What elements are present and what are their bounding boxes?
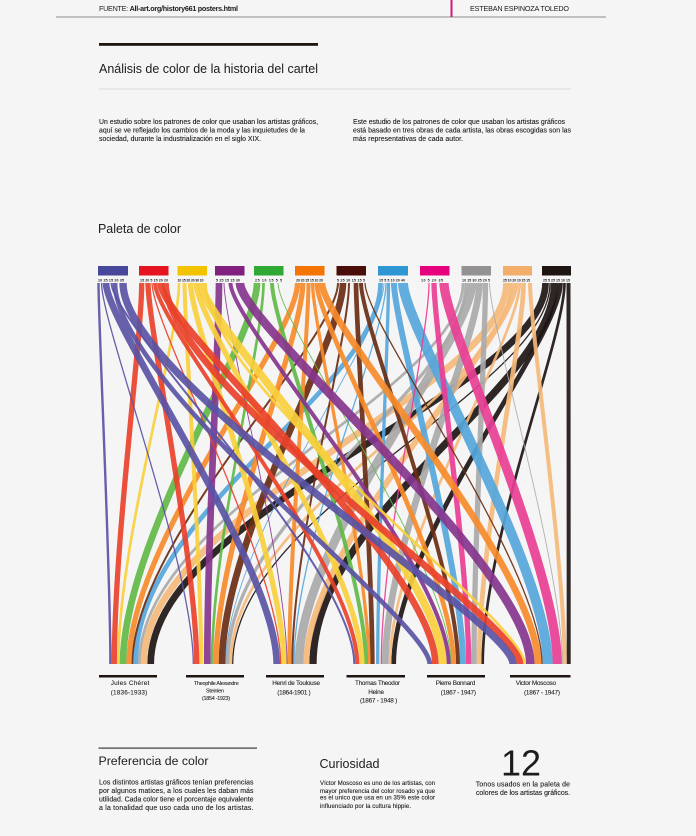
percentage labels under swatches: 10 5 20 35 [421, 278, 443, 282]
artist label: Jules Chéret [111, 680, 150, 696]
intro text right: Este estudio de los patrones de color que usaban los artistas gráficos [353, 119, 566, 126]
body text: Víctor Moscoso es uno de los artistas, con [320, 781, 435, 787]
artist label: Thomas Theodor Heine: (1867 - 1948 ) [360, 698, 397, 704]
source credit: FUENTE: All-art.org/history661 posters.html [99, 4, 238, 13]
percentage labels under swatches: 10 15 30 25 20 5 [462, 278, 490, 282]
body text: es el unico que usa en un 35% este color [320, 796, 435, 802]
percentage labels under swatches: 10 25 15 20 35 [98, 278, 124, 282]
ribbons: green [123, 283, 451, 664]
artist baseline rules [99, 675, 570, 678]
artist label: Jules Chéret: Jules Chéret [111, 680, 150, 687]
artist label: Pierre Bonnard: Pierre Bonnard [436, 680, 476, 687]
ribbons: orange [129, 283, 538, 664]
percentage labels under swatches: 10 15 20 20 30 10 [178, 278, 204, 282]
colour palette swatches [98, 266, 571, 276]
artist label: Thomas Theodor Heine: Heine [368, 689, 384, 696]
percentage labels under swatches: 15 20 5 15 20 20 [140, 278, 168, 282]
ribbons: purple [207, 283, 530, 664]
header: source and author [56, 0, 606, 18]
heading: palette: Paleta de color [98, 222, 181, 236]
intro text right [353, 119, 572, 143]
artist label: Theophile Alexandre Steinlen [194, 681, 239, 702]
artist label: Jules Chéret: (1836-1933) [111, 690, 147, 696]
body text: influenciado por la cultura hippie. [320, 804, 411, 810]
ribbons: brown [132, 283, 542, 664]
chart: colour palette to artists ribbon diagram [98, 266, 571, 678]
ribbons: black [151, 283, 569, 664]
percentage labels under swatches: 5 25 10 15 15 5 [337, 278, 365, 282]
percentage labels under swatches [98, 278, 570, 282]
body text: por algunos matices, a los cuales les daban más [99, 788, 254, 795]
artist label: Theophile Alexandre Steinlen: Steinlen [206, 688, 224, 694]
stat: twelve tones [476, 742, 570, 797]
body text: a la tonalidad que uso cada uno de los artistas. [99, 805, 254, 812]
ribbons: sky blue [136, 283, 548, 664]
intro text left: sociedad, durante la industrialización en el siglo XIX. [99, 136, 261, 143]
artist label: Henri de Toulouse: (1864-1901 ) [277, 690, 311, 696]
ribbons: yellow [118, 283, 525, 664]
ribbons: blue [98, 283, 513, 664]
artist label: Henri de Toulouse: Henri de Toulouse [272, 680, 320, 687]
main title: Análisis de color de la historia del cartel [99, 62, 318, 76]
artist label: Victor Moscoso: Victor Moscoso [516, 680, 556, 687]
section: curiosity [320, 757, 436, 810]
body text: utilidad. Cada color tiene el porcentaje equivalente [99, 796, 254, 804]
artist label: Thomas Theodor Heine [355, 680, 401, 704]
artist label: Victor Moscoso [516, 680, 560, 696]
body text: mayor preferencia del color rosado ya que [320, 789, 436, 795]
stat caption: colores de los artistas gráficos. [476, 790, 570, 797]
artist label: Pierre Bonnard: (1867 - 1947) [441, 690, 476, 696]
intro text left: Un estudio sobre los patrones de color que usaban los artistas gráficos, [99, 119, 318, 126]
intro text right: está basado en tres obras de cada artista, las obras escogidas son las [353, 128, 572, 134]
section: colour preference [98, 748, 257, 812]
big number: 12 [501, 742, 541, 784]
artist label: Theophile Alexandre Steinlen: Theophile Alexandre [194, 681, 239, 687]
intro text left [99, 119, 318, 143]
ribbons: pink [381, 283, 557, 664]
body text [320, 781, 436, 810]
stat caption [476, 782, 570, 797]
percentage labels under swatches: 25 10 15 5 5 [255, 278, 282, 282]
percentage labels under swatches: 20 20 15 15 10 20 [296, 278, 323, 282]
ribbons: peach [144, 283, 565, 664]
stat caption: Tonos usados en la paleta de [476, 782, 570, 788]
ribbons: grey [139, 283, 562, 664]
artist label: Henri de Toulouse [272, 680, 320, 696]
artist label: Victor Moscoso: (1867 - 1947) [524, 690, 560, 696]
intro text left: aquí se ve reflejado los cambios de la moda y las inquietudes de la [99, 128, 305, 134]
percentage labels under swatches: 5 25 15 15 30 [216, 278, 240, 282]
body text [99, 780, 254, 812]
author name: ESTEBAN ESPINOZA TOLEDO [470, 4, 569, 13]
ribbons: red [114, 283, 520, 664]
percentage labels under swatches: 25 10 20 10 15 15 [503, 278, 530, 282]
intro text right: más representativas de cada autor. [353, 136, 463, 143]
heading: Preferencia de color [98, 754, 208, 768]
artist label: Pierre Bonnard [436, 680, 476, 696]
body text: Los distintos artistas gráficos tenían preferencias [99, 780, 254, 786]
heading: Curiosidad [320, 757, 380, 771]
artist label: Thomas Theodor Heine: Thomas Theodor [355, 680, 401, 687]
percentage labels under swatches: 15 5 5 10 20 40 [379, 278, 405, 282]
artist label: Theophile Alexandre Steinlen: (1854 -1923) [202, 696, 230, 702]
percentage labels under swatches: 25 5 25 15 10 15 [543, 278, 570, 282]
